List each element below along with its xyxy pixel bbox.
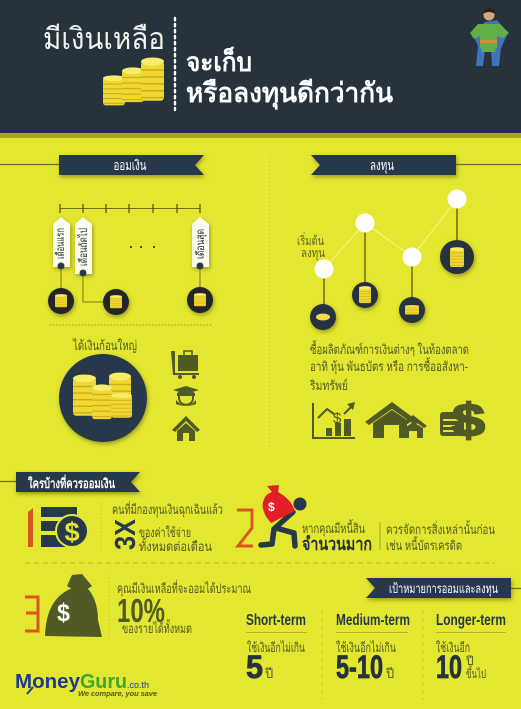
tag: second month [75, 217, 92, 276]
column: medium-term: ใช้เงินอีกไม่เกิน [336, 640, 396, 655]
text: clear debts [386, 520, 495, 553]
icon: superhero mascot [470, 8, 509, 66]
icon: money bag: $ [57, 599, 70, 627]
text: emergency fund: คนที่มีกองทุนเงินฉุกเฉินแล้ว [112, 501, 223, 518]
connectors [61, 270, 200, 302]
investing description: อาทิ หุ้น พันธบัตร หรือ การซื้ออสังหา- [310, 357, 468, 375]
title: second part: จะเก็บ [186, 46, 252, 77]
text: debt [302, 519, 372, 554]
title: second part [186, 46, 394, 110]
number 1 [28, 508, 33, 547]
ribbon: investing heading [311, 155, 521, 175]
dotted separator [50, 324, 213, 326]
coin: second [103, 289, 129, 315]
ellipsis dots [130, 246, 155, 248]
investing description: ริมทรัพย์ [309, 378, 348, 393]
text: spare money: คุณมีเงินเหลือที่จะออมได้ประมาณ [117, 580, 251, 597]
start investing label [297, 232, 325, 261]
savings timeline [48, 204, 213, 315]
text: monthly expenses: ทั้งหมดต่อเดือน [139, 537, 212, 554]
text: of income: ของรายได้ทั้งหมด [122, 619, 192, 636]
column: short-term: 5 [246, 649, 263, 685]
item 1 [28, 501, 223, 554]
coin: small [310, 304, 336, 330]
number 2 [237, 510, 253, 546]
logo: MoneyGuru: We compare, you save [78, 689, 157, 698]
icon: emergency fund [41, 507, 88, 547]
column: longer-term: ปี [465, 654, 474, 668]
logo: MoneyGuru: .co.th [127, 680, 149, 690]
ribbon: savings heading: ออมเงิน [114, 157, 147, 173]
text: clear debts: เช่น หนี้บัตรเครดิต [386, 536, 462, 553]
tag: first month: เดือนแรก [54, 228, 67, 259]
ribbon: goals [366, 578, 521, 598]
column: longer-term: ขึ้นไป [466, 665, 486, 681]
ribbon: investing heading: ลงทุน [370, 157, 394, 174]
icon: person carrying debt: $ [268, 500, 275, 514]
column: short-term: ปี [264, 666, 273, 681]
text: debt: หากคุณมีหนี้สิน [302, 519, 365, 537]
icon: growth chart: $ [333, 410, 342, 427]
icon: shopping cart [171, 351, 199, 379]
text: debt: จำนวนมาก [302, 534, 372, 554]
tag: second month: เดือนถัดไป [77, 228, 90, 266]
tag: first month [53, 217, 70, 270]
item 2 [237, 485, 495, 554]
icon: card and dollar [440, 394, 485, 446]
3X figure: 3X [110, 518, 142, 550]
column: longer-term: ใช้เงินอีก [436, 640, 470, 655]
big coin circle [59, 354, 147, 442]
column: longer-term: 10 [436, 649, 462, 685]
column: medium-term: Medium-term [336, 612, 410, 629]
dotted divider [174, 18, 176, 110]
number 3 [25, 597, 38, 631]
investing line chart [310, 190, 474, 330]
coin: third [187, 287, 213, 313]
title: second part: หรือลงทุนดีกว่ากัน [186, 78, 394, 110]
dashed separator [25, 562, 495, 564]
column: medium-term [336, 612, 410, 685]
start investing label: ลงทุน [301, 246, 325, 261]
icon: money bag [45, 574, 102, 637]
coin: medium [352, 282, 378, 308]
column: short-term: Short-term [246, 612, 306, 629]
title: first part: มีเงินเหลือ [43, 23, 165, 56]
icon: emergency fund: $ [64, 517, 80, 547]
icon: coin stacks [103, 57, 164, 105]
coin: first [48, 288, 74, 314]
column: medium-term: ปี [385, 666, 394, 681]
lump sum label: ได้เงินก้อนใหญ่ [72, 338, 137, 353]
icon: card and dollar: $ [452, 394, 485, 446]
tag: last month: เดือนสุด [194, 229, 207, 259]
logo: MoneyGuru [15, 671, 157, 698]
ribbon: who should save [0, 472, 140, 492]
10 percent figure: 10% [117, 592, 165, 629]
coin: low [399, 297, 425, 323]
ribbon: savings heading [0, 155, 204, 175]
column: medium-term: 5-10 [336, 649, 383, 685]
coin: large [440, 240, 474, 274]
icon: person carrying debt [261, 485, 306, 546]
ribbon: who should save: ใครบ้างที่ควรออมเงิน [28, 474, 115, 491]
investing description [309, 340, 469, 393]
icon: growth chart [312, 402, 355, 439]
investing description: ซื้อผลิตภัณฑ์การเงินต่างๆ ในท้องตลาด [310, 340, 469, 357]
text: monthly expenses: ของค่าใช้จ่าย [139, 525, 191, 540]
logo: MoneyGuru: Money [15, 671, 81, 693]
header banner [0, 0, 521, 138]
column: short-term: ใช้เงินอีกไม่เกิน [247, 640, 305, 655]
text: monthly expenses [139, 525, 212, 554]
icon: graduate [173, 386, 199, 406]
vertical dotted divider [265, 155, 267, 450]
tag: last month [192, 217, 209, 270]
start investing label: เริ่มต้น [297, 232, 324, 248]
icon: houses [365, 402, 427, 438]
logo: MoneyGuru: Guru [80, 671, 127, 693]
item 3 [25, 574, 251, 638]
column: short-term [246, 612, 307, 685]
column: longer-term [436, 612, 506, 685]
icon: house [172, 416, 200, 441]
